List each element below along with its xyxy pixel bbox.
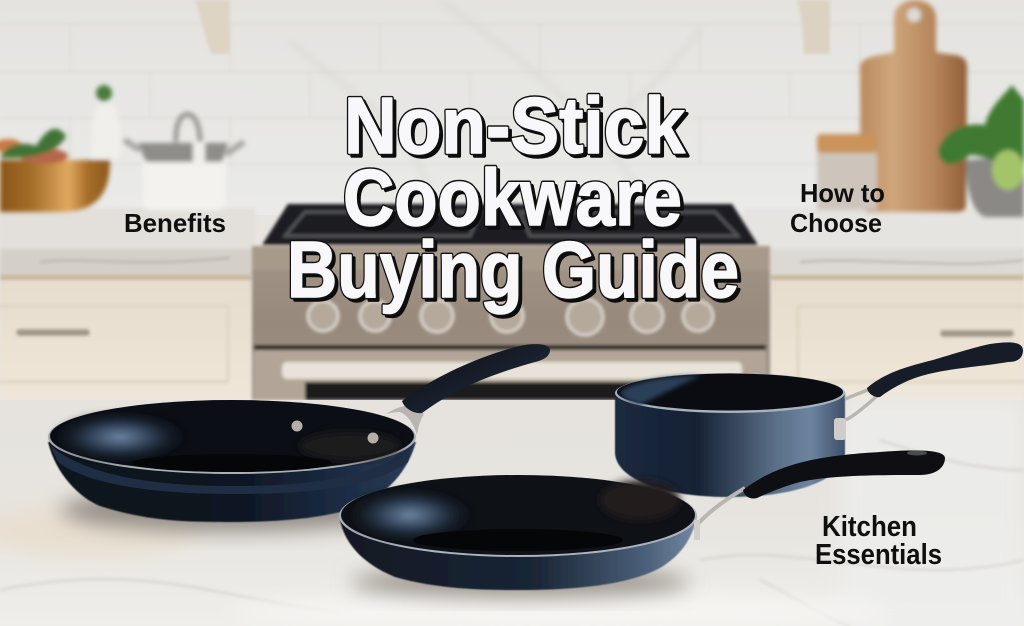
side countertops (0, 208, 1024, 278)
saucepan handle bracket (845, 389, 877, 420)
title shadow: Cookware (346, 156, 685, 245)
shelf brackets (195, 0, 830, 54)
left countertop items: copper bowl, herbs, white pot (0, 85, 244, 212)
title outline (287, 81, 739, 314)
title text (287, 81, 739, 314)
title shadow: Buying Guide (290, 228, 742, 317)
front pan handle (694, 450, 945, 540)
title text: Cookware (343, 153, 682, 242)
label: How to Choose: How to (800, 178, 885, 208)
label: How to Choose (790, 178, 885, 238)
label: Kitchen Essentials: Essentials (815, 539, 942, 571)
label: Benefits: Benefits (124, 208, 226, 238)
background: kitchen wall (0, 0, 1024, 215)
title outline: Non-Stick (344, 81, 685, 170)
label: Kitchen Essentials (815, 511, 942, 571)
pan: left frying pan (48, 344, 550, 532)
title shadow (290, 84, 742, 317)
title outline: Cookware (343, 153, 682, 242)
pan: saucepan (615, 342, 1023, 497)
cabinets (0, 275, 1024, 400)
title text: Non-Stick (344, 81, 685, 170)
title (287, 81, 742, 317)
label: Kitchen Essentials: Kitchen (822, 511, 917, 543)
title text: Buying Guide (287, 225, 739, 314)
foreground marble counter (0, 400, 1024, 626)
saucepan handle (867, 342, 1023, 397)
label: How to Choose: Choose (790, 208, 882, 238)
title outline: Buying Guide (287, 225, 739, 314)
left pan handle (386, 344, 550, 435)
title shadow: Non-Stick (347, 84, 688, 173)
stove (252, 204, 770, 400)
pan: front frying pan (339, 450, 945, 598)
right countertop items: jars, cutting board, plant (817, 0, 1024, 217)
rivets (292, 420, 378, 444)
